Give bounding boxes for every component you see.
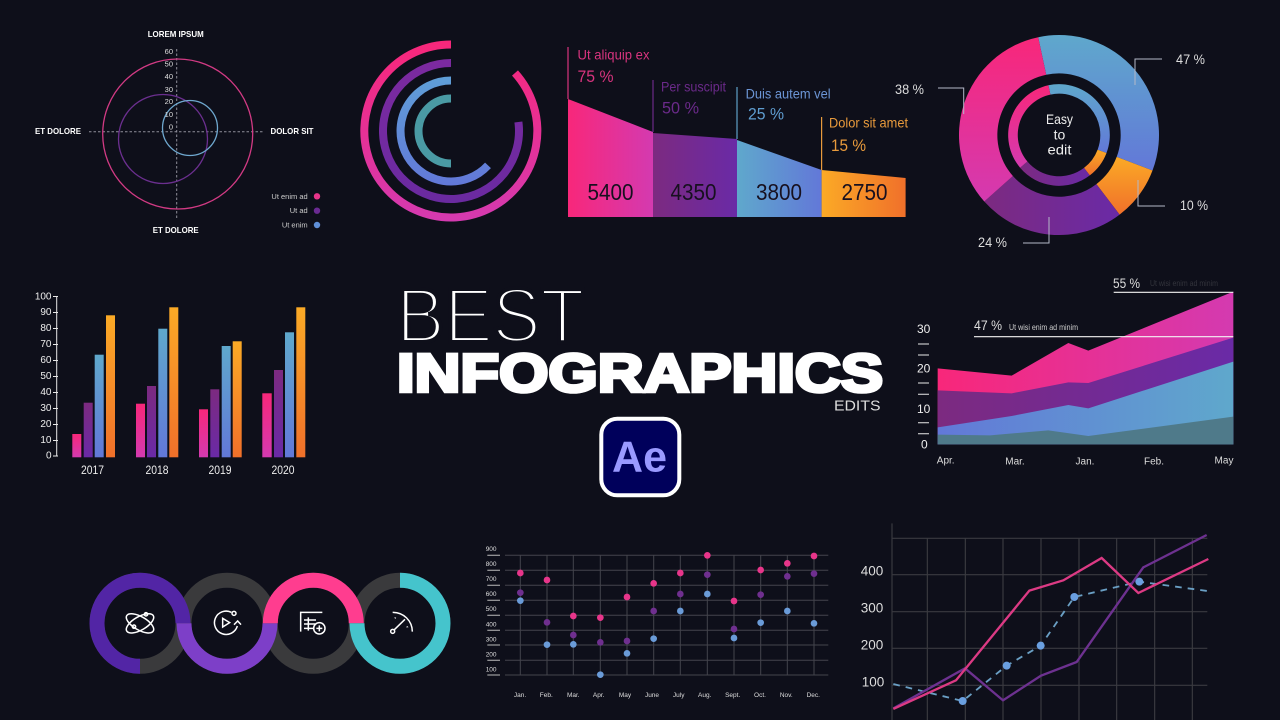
outer pink segment <box>959 37 1046 202</box>
dot plot y labels: 400 <box>486 622 497 628</box>
bars 2017 <box>72 315 115 477</box>
dot plot month labels: Oct. <box>754 692 766 699</box>
dot plot month labels: Dec. <box>807 692 820 699</box>
grey ring tracks <box>97 580 443 666</box>
pink line <box>893 558 1208 709</box>
polar axis labels: ET DOLORE <box>153 225 199 235</box>
icon: list with plus <box>301 612 325 634</box>
polar axis labels <box>35 29 314 235</box>
bar chart scale: 30 <box>40 403 52 414</box>
callout 55 percent line: 55 % <box>1113 275 1140 291</box>
segment 1: 75 % <box>578 67 614 86</box>
area chart x labels: Mar. <box>1005 456 1025 468</box>
area chart x labels: Feb. <box>1144 456 1164 468</box>
dot plot grid <box>505 555 828 675</box>
icon: After Effects logo: Ae <box>612 432 667 482</box>
polar scale numbers: 30 <box>165 85 173 94</box>
dot plot month labels <box>514 692 820 699</box>
ring 4 teal <box>357 580 443 666</box>
panel: bar chart <box>35 292 305 477</box>
purple circle <box>118 94 208 184</box>
line chart y labels: 400 <box>861 564 883 578</box>
area chart y axis: 10 <box>917 402 931 416</box>
polar legend: Ut ad <box>290 206 308 215</box>
line chart y labels <box>861 564 884 690</box>
bar chart axis <box>53 296 58 456</box>
segment 3: Duis autem vel <box>746 86 831 102</box>
donut centre text <box>1046 111 1073 158</box>
donut centre text: Easy <box>1046 111 1073 127</box>
bar chart scale: 100 <box>35 292 52 302</box>
bars 2018: 2018 <box>146 465 168 477</box>
donut centre text: edit <box>1048 142 1072 158</box>
segment 1 <box>568 46 653 217</box>
area chart y axis: 0 <box>921 438 928 452</box>
segment 4: 15 % <box>831 136 866 155</box>
icon: play with circular arrow <box>214 611 241 634</box>
heading: INFOGRAPHICS: INFOGRAPHICS <box>397 343 883 403</box>
area chart x labels: Apr. <box>937 456 955 466</box>
segment 2: 4350 <box>670 179 716 205</box>
area chart x labels: May <box>1215 456 1233 466</box>
dot plot y labels: 300 <box>486 636 497 644</box>
polar axis labels: DOLOR SIT <box>270 126 314 136</box>
bar chart scale: 40 <box>40 387 52 398</box>
segment 3: 3800 <box>756 179 802 205</box>
dot plot month labels: May <box>619 692 632 699</box>
dot plot y labels <box>486 546 497 674</box>
bars 2017: 2017 <box>81 465 104 477</box>
segment 2: Per suscipit <box>661 78 726 94</box>
polar scale numbers: 50 <box>165 60 173 68</box>
purple dots <box>517 570 817 646</box>
bars 2019: 2019 <box>208 465 232 477</box>
bar chart scale <box>35 292 52 462</box>
panel: stacked area chart <box>917 275 1233 468</box>
polar scale numbers: 40 <box>165 72 173 81</box>
bar chart scale: 80 <box>40 323 52 334</box>
purple line <box>893 535 1207 708</box>
bars 2018 <box>136 307 178 477</box>
inner ring <box>1008 84 1110 186</box>
blue area <box>938 362 1233 444</box>
dot plot month labels: Mar. <box>567 692 580 699</box>
callout 47 percent <box>1135 51 1205 85</box>
panel: donut chart <box>895 35 1208 250</box>
bars 2020 <box>262 307 305 477</box>
outer pink arc <box>364 44 537 217</box>
pink circle <box>103 59 253 209</box>
segment 1: Ut aliquip ex <box>578 46 650 62</box>
callout 10 percent: 10 % <box>1180 197 1208 213</box>
dot plot month labels: Feb. <box>540 692 553 699</box>
bar chart scale: 90 <box>40 307 52 318</box>
panel: polar chart <box>35 29 320 235</box>
dot plot y labels: 500 <box>486 606 497 613</box>
polar legend: Ut enim <box>282 220 308 230</box>
heading: BEST: BEST <box>396 273 584 359</box>
callout 10 percent <box>1138 180 1208 213</box>
callout 24 percent <box>978 217 1049 250</box>
bar chart scale: 60 <box>40 355 52 366</box>
dot plot y labels: 200 <box>486 652 497 658</box>
polar legend <box>271 192 320 230</box>
polar scale numbers: 20 <box>165 97 173 106</box>
outer blue segment <box>1038 35 1159 171</box>
dot plot month labels: Nov. <box>780 692 793 699</box>
dot plot month labels: Sept. <box>725 692 740 699</box>
segment 2 <box>653 78 737 217</box>
pink area <box>938 292 1233 444</box>
dot plot y labels: 600 <box>486 591 497 598</box>
bar chart scale: 70 <box>40 339 52 350</box>
panel: line chart <box>861 523 1208 720</box>
ring 3 pink <box>270 580 356 623</box>
teal arc <box>419 98 451 164</box>
dot plot month labels: Apr. <box>593 692 605 699</box>
panel: dot plot <box>486 546 828 699</box>
teal area <box>938 417 1233 444</box>
ring 1 dark purple <box>97 580 183 666</box>
title block <box>396 273 883 495</box>
dot plot y labels: 800 <box>486 561 497 568</box>
area chart y axis: 20 <box>917 362 931 376</box>
outer purple segment <box>984 176 1120 235</box>
line chart y labels: 300 <box>861 600 883 616</box>
blue circle <box>162 100 218 156</box>
panel: progress rings with icons <box>97 580 443 666</box>
blue dashed line with points <box>893 578 1207 705</box>
area chart y axis: 30 <box>917 322 931 336</box>
dot plot ticks <box>487 555 500 675</box>
dot plot y labels: 900 <box>486 546 497 553</box>
bar chart scale: 0 <box>46 450 52 462</box>
area chart x labels: Jan. <box>1076 456 1094 468</box>
callout 47 percent line <box>974 317 1233 337</box>
bar chart scale: 50 <box>40 371 52 382</box>
callout 24 percent: 24 % <box>978 234 1007 250</box>
polar axes <box>89 49 263 218</box>
dot plot month labels: July <box>673 692 685 699</box>
polar scale numbers: 10 <box>165 110 173 119</box>
line chart y labels: 200 <box>861 638 883 652</box>
line chart grid <box>892 523 1207 720</box>
callout 47 percent line: 47 % <box>974 317 1002 333</box>
purple arc <box>383 63 519 199</box>
purple area <box>938 338 1233 444</box>
callout 38 percent <box>895 81 964 114</box>
polar axis labels: LOREM IPSUM <box>148 29 204 39</box>
subheading: EDITS: EDITS <box>834 398 880 414</box>
ring 2 purple <box>184 623 270 666</box>
icon: After Effects logo <box>601 419 679 495</box>
blue dots <box>517 591 817 678</box>
dot plot y labels: 700 <box>486 576 497 583</box>
callout 55 percent line <box>1113 275 1233 292</box>
polar scale numbers: 60 <box>165 47 173 56</box>
bar chart scale: 10 <box>40 435 52 446</box>
area chart y axis <box>917 322 931 452</box>
segment 4: Dolor sit amet <box>829 115 908 131</box>
area chart x labels <box>937 456 1233 468</box>
segment 3 <box>737 86 831 217</box>
callout 47 percent line: Ut wisi enim ad minim <box>1009 322 1078 332</box>
segment 2: 50 % <box>662 98 699 118</box>
pink dots <box>517 552 817 621</box>
dot plot month labels: Aug. <box>698 692 712 699</box>
line chart y labels: 100 <box>862 674 884 690</box>
dot plot month labels: June <box>645 692 659 699</box>
bars 2019 <box>199 341 242 477</box>
panel: funnel area chart <box>568 46 908 217</box>
dot plot month labels: Jan. <box>514 692 526 699</box>
icon: gauge <box>391 612 412 633</box>
callout 47 percent: 47 % <box>1176 51 1205 67</box>
bar chart scale: 20 <box>40 419 52 430</box>
outer orange segment <box>1096 157 1152 215</box>
dot plot y labels: 100 <box>486 666 497 674</box>
callout 38 percent: 38 % <box>895 81 924 97</box>
callout 55 percent line: Ut wisi enim ad minim <box>1150 278 1218 288</box>
donut centre text: to <box>1054 126 1066 142</box>
polar legend: Ut enim ad <box>271 192 308 201</box>
icon: atom <box>123 610 157 637</box>
bars 2020: 2020 <box>272 465 294 477</box>
segment 3: 25 % <box>748 104 784 124</box>
polar scale numbers: 0 <box>169 122 173 132</box>
panel: radial bars <box>364 44 537 217</box>
segment 4 <box>822 115 908 217</box>
polar axis labels: ET DOLORE <box>35 126 81 136</box>
segment 1: 5400 <box>588 179 634 205</box>
segment 4: 2750 <box>842 179 888 205</box>
polar scale numbers <box>165 47 173 132</box>
blue arc <box>401 80 488 181</box>
